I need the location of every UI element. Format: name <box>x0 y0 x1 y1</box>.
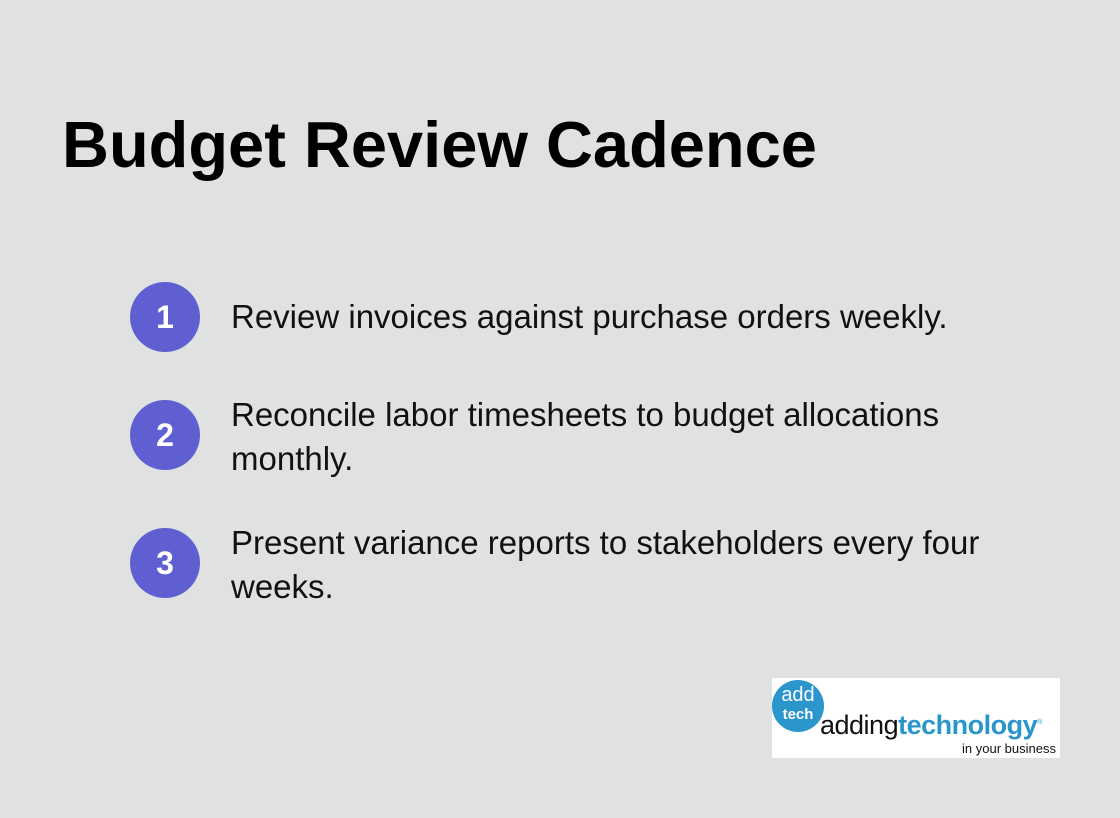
logo circle <box>772 680 824 732</box>
step 3 text: Present variance reports to stakeholders every four weeks. <box>231 524 979 605</box>
badge 2 <box>130 400 200 470</box>
logo <box>772 678 1060 758</box>
badge 3: 3 <box>156 545 174 581</box>
badge 1: 1 <box>156 299 174 335</box>
badge 2: 2 <box>156 417 174 453</box>
badge 1 <box>130 282 200 352</box>
step 2 text: Reconcile labor timesheets to budget allocations monthly. <box>231 396 939 477</box>
step 2 <box>130 396 939 477</box>
logo circle: tech <box>783 706 813 723</box>
title: Budget Review Cadence <box>62 108 817 181</box>
logo circle: add <box>781 684 815 706</box>
step 1 <box>130 282 948 352</box>
logo tagline: in your business <box>962 741 1056 756</box>
step 1 text: Review invoices against purchase orders weekly. <box>231 298 948 335</box>
step 3 <box>130 524 979 605</box>
logo wordmark: addingtechnology® <box>820 710 1042 740</box>
badge 3 <box>130 528 200 598</box>
